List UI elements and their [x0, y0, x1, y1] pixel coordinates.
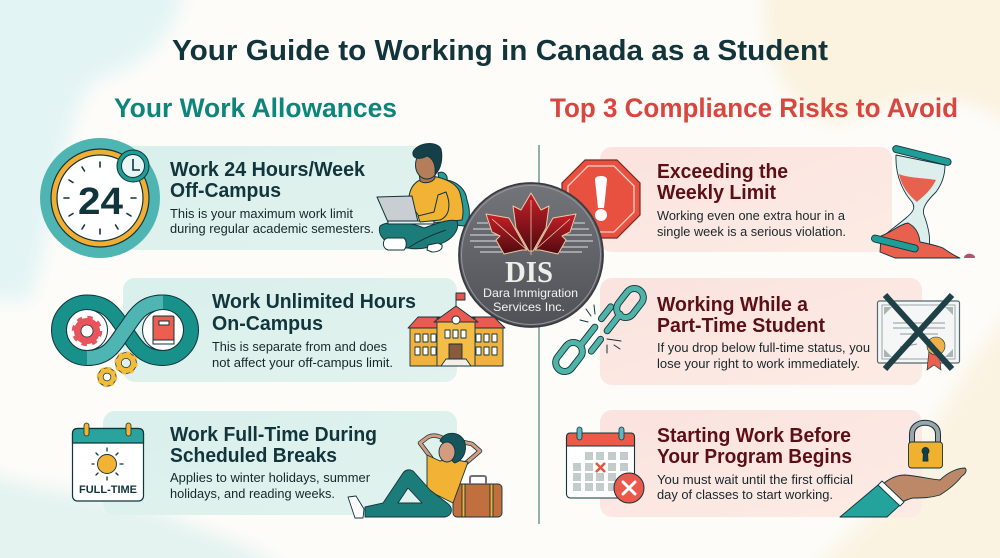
panel: unlimited on-campus: [59, 278, 505, 386]
illustration: hand holding padlock: [840, 423, 966, 517]
heading: Working While a: [657, 294, 809, 316]
illustration: hourglass: [871, 145, 975, 258]
icon: calendar with x: [566, 427, 644, 503]
card background: [100, 146, 425, 250]
illustration: school: [408, 293, 505, 366]
heading: compliance risks: Top 3 Compliance Risks to Avoid: [550, 93, 958, 123]
description: [170, 206, 374, 236]
heading: Scheduled Breaks: [170, 445, 337, 467]
description: Applies to winter holidays, summer: [170, 470, 371, 485]
card background: [123, 278, 457, 382]
description: [170, 470, 371, 501]
illustration: crossed-out certificate: [878, 295, 960, 370]
description: Working even one extra hour in a: [657, 208, 846, 223]
panel: part-time student: [552, 278, 960, 385]
heading: On-Campus: [212, 313, 323, 335]
description: You must wait until the first official: [657, 472, 853, 487]
heading: [657, 294, 825, 337]
illustration: relaxing student with suitcase: [348, 433, 502, 518]
icon: red gear: [74, 318, 100, 344]
icon: clock 24: 24: [78, 181, 123, 223]
icon: infinity loop: [59, 302, 191, 386]
heading: [212, 291, 416, 335]
icon: stop sign: [562, 160, 640, 238]
icon: clock 24: [40, 138, 160, 258]
card background: [600, 278, 922, 385]
logo: Dara Immigration Services: Services Inc.: [493, 300, 565, 314]
description: This is separate from and does: [212, 339, 387, 354]
panel: exceeding weekly limit: [562, 145, 975, 258]
panel: full-time during breaks: [72, 411, 502, 518]
description: day of classes to start working.: [657, 487, 833, 502]
icon: yellow gears: [98, 353, 136, 386]
heading: your work allowances: Your Work Allowances: [114, 93, 397, 123]
icon: broken chain: [552, 285, 647, 375]
description: single week is a serious violation.: [657, 224, 846, 239]
icon: full-time calendar: [72, 423, 144, 501]
heading: [657, 425, 852, 468]
description: If you drop below full-time status, you: [657, 340, 870, 355]
description: not affect your off-campus limit.: [212, 355, 393, 370]
description: [657, 340, 870, 371]
panel: work 24 hours: [40, 138, 469, 258]
heading: Weekly Limit: [657, 182, 776, 204]
description: [657, 472, 853, 502]
description: This is your maximum work limit: [170, 206, 353, 221]
description: [657, 208, 846, 239]
description: during regular academic semesters.: [170, 221, 374, 236]
heading: Work Unlimited Hours: [212, 291, 416, 313]
column divider: [538, 145, 540, 524]
heading: [170, 159, 366, 202]
heading: Starting Work Before: [657, 425, 851, 447]
panel: starting before program: [566, 410, 966, 517]
heading: Off-Campus: [170, 180, 281, 202]
description: [212, 339, 393, 370]
heading: Part-Time Student: [657, 315, 825, 337]
illustration: student with laptop: [377, 144, 469, 252]
card background: [103, 411, 457, 515]
heading: Your Program Begins: [657, 446, 852, 468]
icon: full-time calendar: FULL-TIME: [79, 484, 137, 496]
logo: Dara Immigration Services: [459, 183, 603, 327]
heading: [657, 161, 788, 204]
heading: [170, 424, 377, 467]
heading: Exceeding the: [657, 161, 788, 183]
logo: Dara Immigration Services: Dara Immigration: [483, 286, 578, 300]
icon: book: [153, 316, 174, 344]
card background: [600, 147, 892, 252]
title: Your Guide to Working in Canada as a Student: [172, 35, 828, 67]
description: holidays, and reading weeks.: [170, 486, 335, 501]
card background: [600, 410, 922, 517]
logo: Dara Immigration Services: DIS: [505, 254, 553, 289]
heading: Work 24 Hours/Week: [170, 159, 366, 181]
heading: Work Full-Time During: [170, 424, 377, 446]
description: lose your right to work immediately.: [657, 356, 860, 371]
